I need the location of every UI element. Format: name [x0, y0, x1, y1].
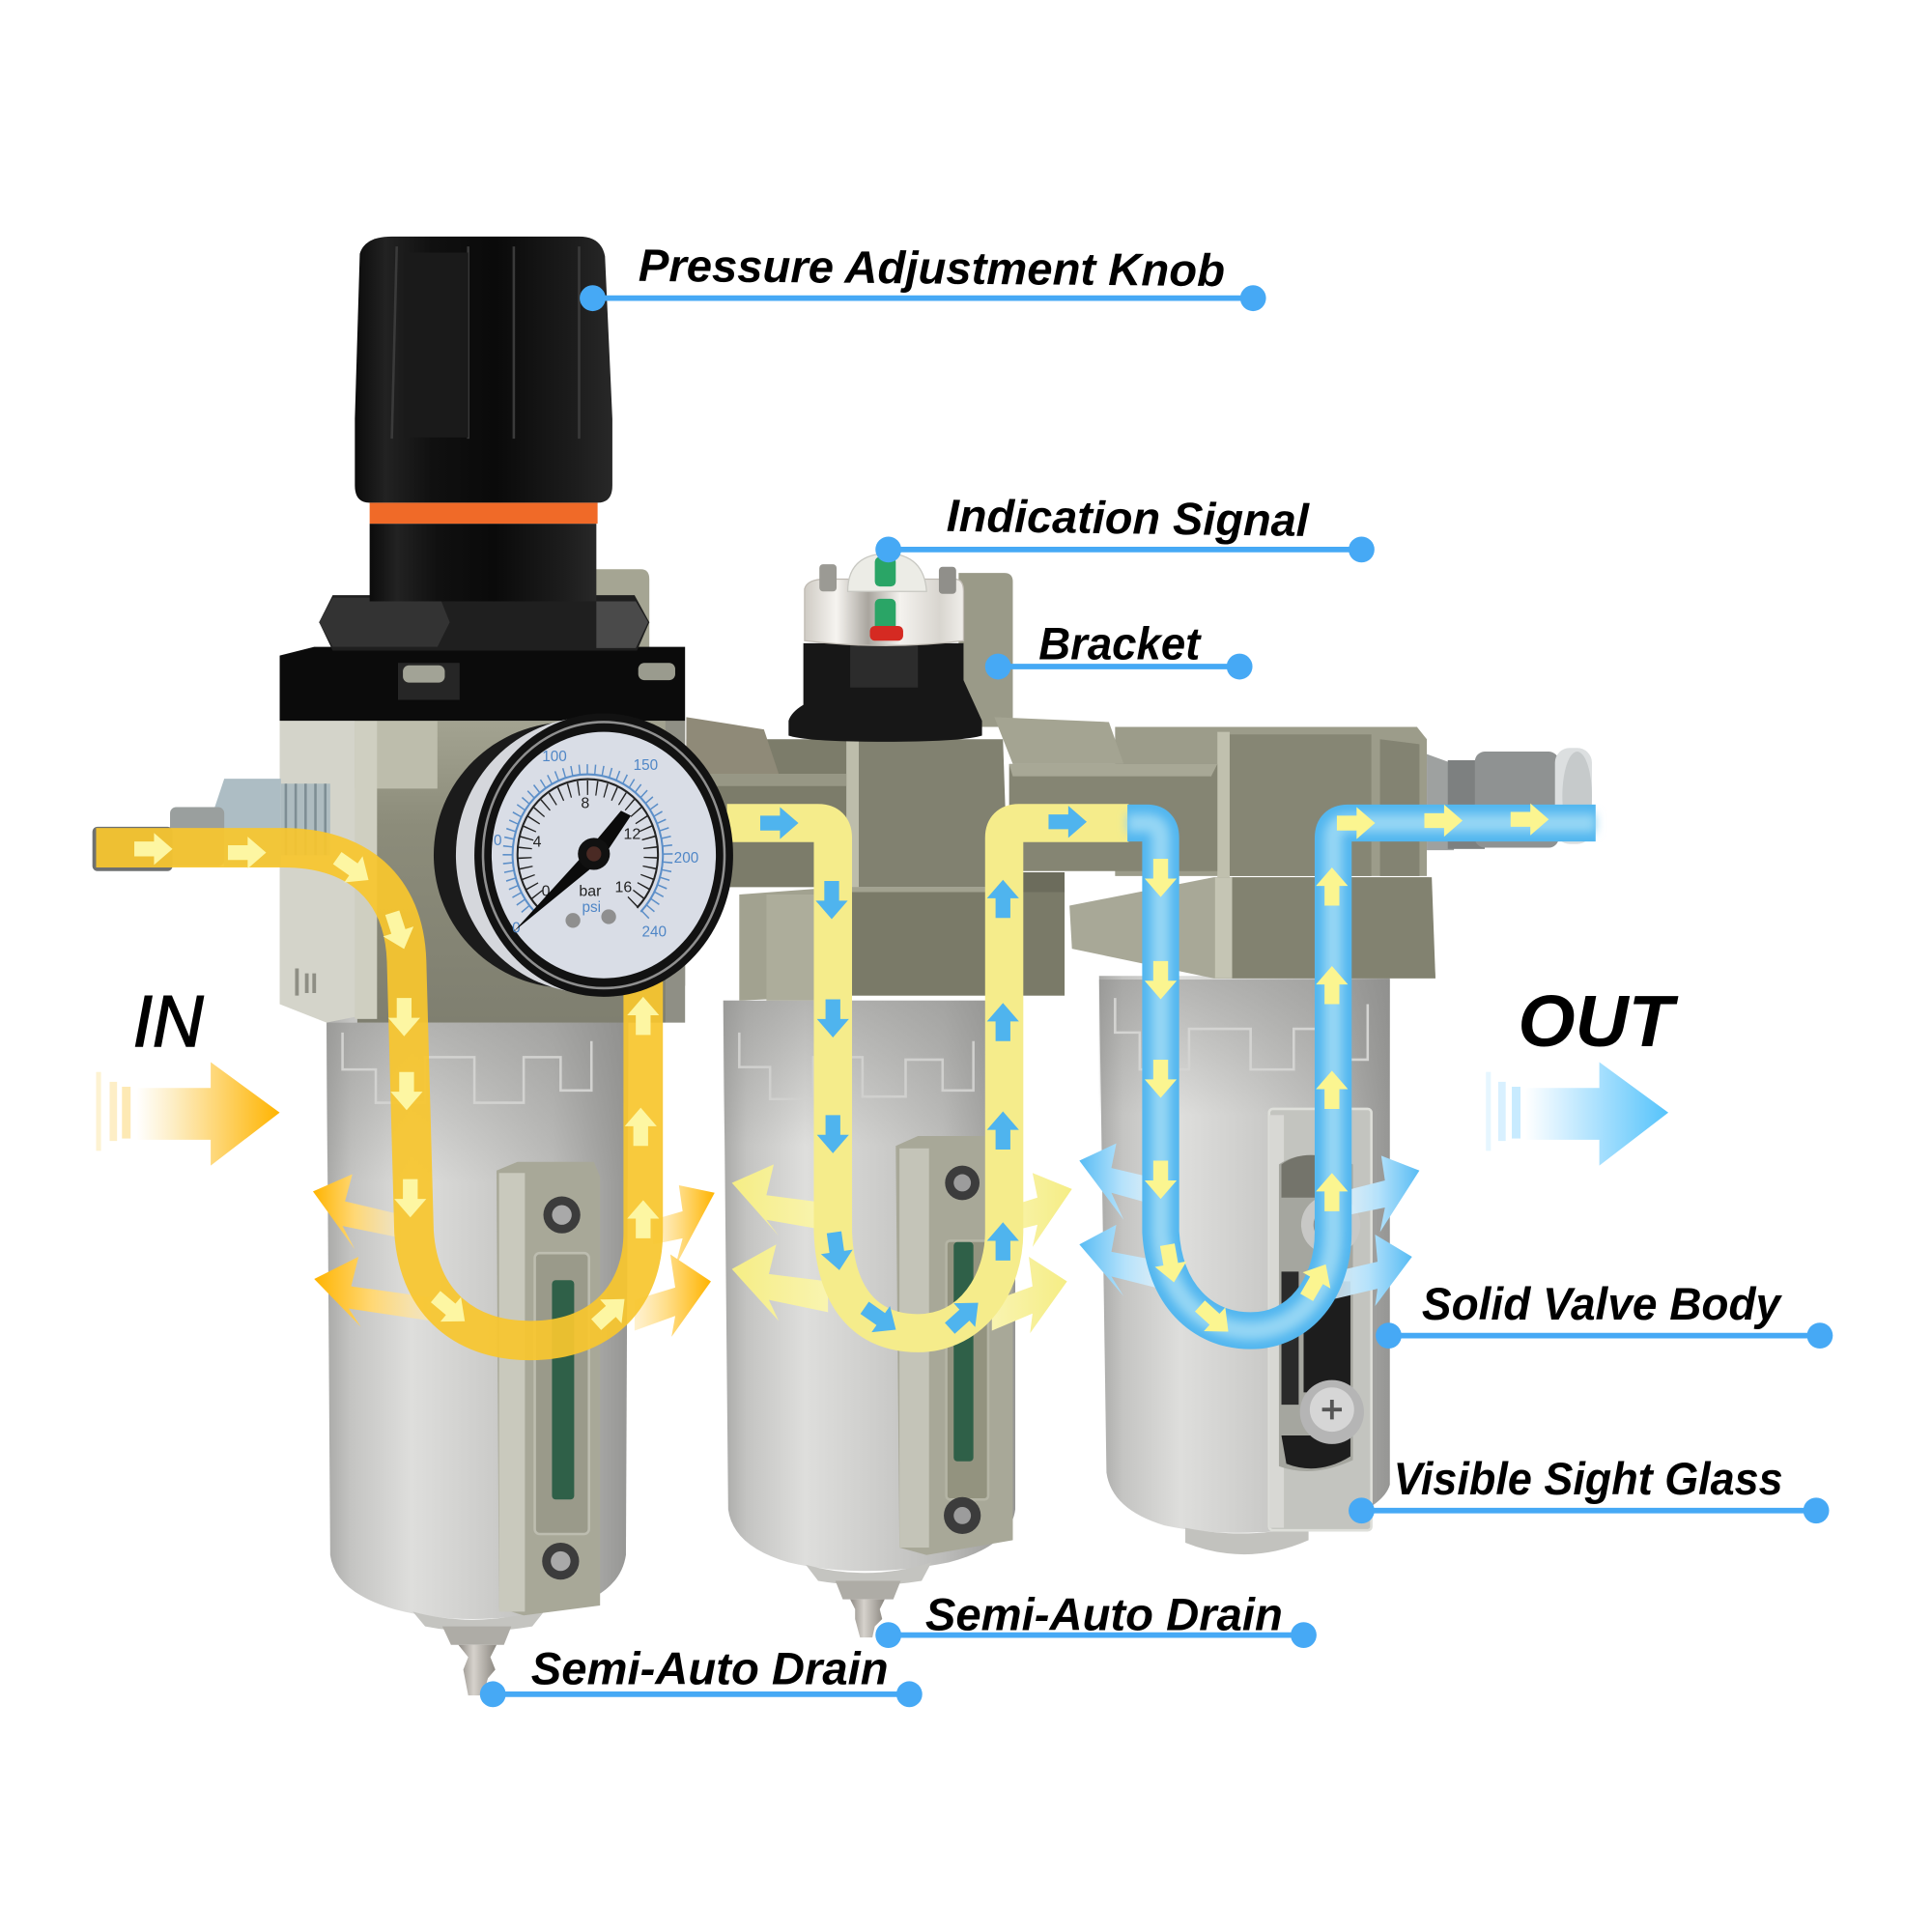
middle unit block [686, 717, 1065, 1001]
gauge scale labels [494, 749, 698, 940]
inlet fitting [93, 779, 330, 871]
pressure gauge [434, 714, 733, 997]
connecting clip and bar [994, 717, 1217, 871]
hex nut [319, 595, 649, 650]
callout: pressure adjustment knob: Pressure Adjustment Knob [639, 241, 1225, 297]
filter bowl 1 [327, 1016, 629, 1695]
gauge scale labels: 0 [494, 833, 502, 849]
filter bowl 3 [1099, 976, 1390, 1554]
sight bracket 1 [497, 1162, 600, 1615]
gauge scale labels: 16 [615, 879, 632, 895]
callout: visible sight glass: Visible Sight Glass [1394, 1454, 1783, 1505]
product: three-stage assembly [93, 237, 1592, 1695]
arrows: orange stage [313, 1175, 715, 1337]
callout: solid valve body: Solid Valve Body [1422, 1279, 1783, 1330]
callout: semi-auto drain left [480, 1644, 923, 1707]
gauge scale labels: 200 [674, 850, 698, 867]
gauge scale labels: 4 [533, 834, 542, 850]
neck [370, 524, 596, 601]
IN label: IN [133, 980, 204, 1062]
orange ring [370, 502, 598, 524]
flow tube: yellow [727, 806, 1128, 1343]
gauge scale labels: 12 [623, 827, 640, 843]
arrows: yellow stage [732, 1164, 1072, 1333]
OUT arrow [1486, 1062, 1668, 1166]
callout: semi-auto drain middle: Semi-Auto Drain [925, 1590, 1283, 1641]
callout: bracket [985, 618, 1253, 679]
gauge scale labels: bar [579, 883, 602, 899]
OUT label: OUT [1518, 980, 1679, 1062]
callout: pressure adjustment knob [580, 241, 1266, 311]
filter bowl 2 [724, 1001, 1015, 1637]
gauge scale labels: 240 [642, 923, 667, 940]
outlet coupler [1427, 748, 1592, 850]
indicator signal [788, 554, 982, 742]
gauge scale labels: 0 [512, 921, 521, 937]
arrows on blue tube [1145, 804, 1548, 1344]
first unit body [280, 721, 685, 1023]
arrows: blue stage [1079, 1144, 1419, 1306]
regulator cap [280, 647, 685, 721]
bracket middle [958, 573, 1012, 727]
sight glass 3 [1269, 1109, 1372, 1530]
gauge scale labels: 0 [542, 883, 551, 899]
gauge scale labels: 100 [542, 749, 567, 765]
callout: solid valve body [1376, 1279, 1833, 1349]
side flow arrows [313, 1144, 1419, 1337]
sight bracket 2 [895, 1136, 1012, 1555]
third unit upper body [1069, 727, 1435, 979]
gauge dial ticks [508, 770, 668, 916]
callout: visible sight glass [1349, 1454, 1829, 1523]
bracket left [591, 569, 649, 653]
flow tube: orange [96, 833, 659, 1341]
flow tube: blue [1127, 804, 1596, 1344]
gauge scale labels: psi [582, 899, 601, 916]
arrows on orange tube [134, 833, 659, 1337]
gauge scale labels: 150 [634, 757, 658, 774]
pressure adjustment knob [355, 237, 612, 502]
callout: bracket: Bracket [1038, 618, 1203, 669]
gauge scale labels: 8 [581, 796, 589, 812]
arrows on yellow tube [760, 806, 1087, 1343]
callout: indication signal: Indication Signal [946, 491, 1310, 547]
callout: semi-auto drain left: Semi-Auto Drain [531, 1644, 889, 1695]
callout: indication signal [875, 491, 1375, 562]
IN arrow [96, 1062, 280, 1166]
